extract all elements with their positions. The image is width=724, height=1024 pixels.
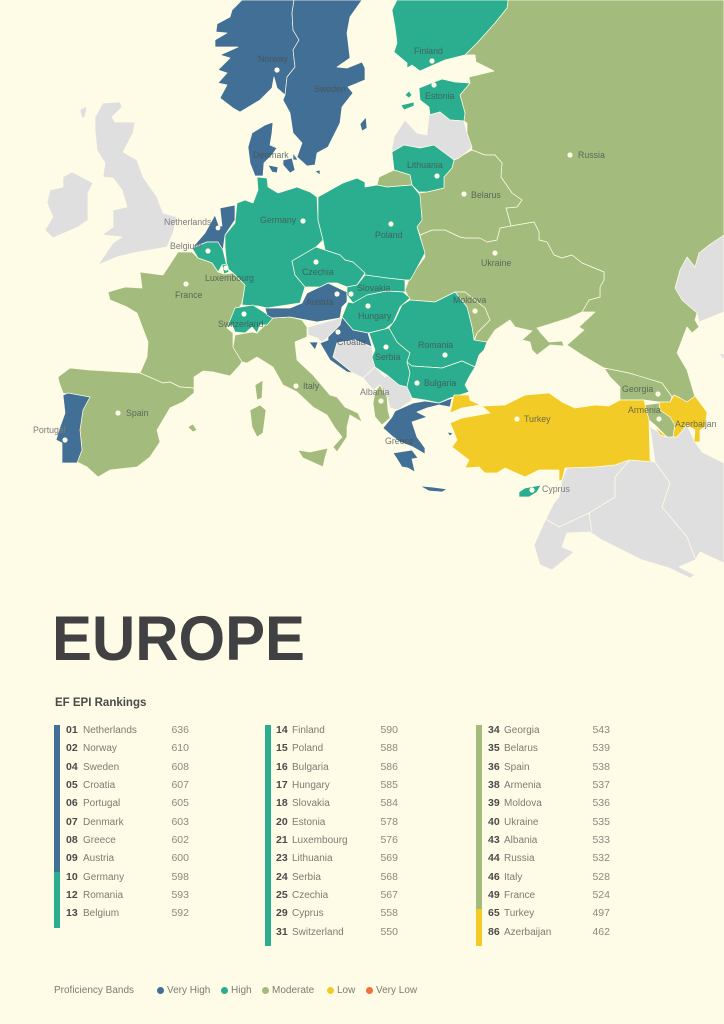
rankings column 1	[54, 724, 189, 928]
country labels: Belarus	[471, 190, 501, 200]
country labels: Switzerland	[218, 319, 264, 329]
country: Lithuania	[392, 145, 454, 192]
row: 01	[66, 724, 78, 736]
country labels: Norway	[258, 54, 288, 64]
row: 24	[276, 871, 288, 883]
row: 578	[380, 816, 398, 828]
row: 65	[488, 907, 500, 919]
country labels: Albania	[360, 387, 389, 397]
island: Corsica	[255, 380, 263, 400]
Middle East borders	[544, 461, 695, 558]
row: 29	[276, 907, 288, 919]
capital dots	[62, 58, 662, 493]
row: 07	[66, 816, 78, 828]
country: Moldova	[455, 292, 490, 340]
country: Croatia	[309, 317, 372, 373]
row: 39	[488, 797, 500, 809]
country: Bosnia	[333, 340, 375, 378]
row: 576	[380, 834, 398, 846]
row	[66, 889, 189, 901]
legend: proficiency bands: High	[231, 985, 252, 996]
country labels: Armenia	[628, 405, 661, 415]
row: 607	[171, 779, 189, 791]
row: Greece	[83, 835, 116, 846]
country: Spain	[58, 368, 194, 477]
legend: proficiency bands: Proficiency Bands	[54, 985, 134, 996]
row: 23	[276, 852, 288, 864]
country: Finland	[392, 0, 508, 71]
region: Kaliningrad	[377, 170, 412, 187]
row: 36	[488, 761, 500, 773]
band bar: high	[265, 725, 271, 946]
country: Cyprus	[519, 485, 541, 497]
country labels: Lithuania	[407, 160, 443, 170]
row: 585	[380, 779, 398, 791]
country labels: Azerbaijan	[675, 419, 717, 429]
legend: proficiency bands: Low	[337, 985, 355, 996]
country labels: France	[175, 290, 202, 300]
row: Turkey	[504, 908, 534, 919]
island: Sicily	[298, 448, 328, 467]
legend: proficiency bands: Very High	[167, 985, 210, 996]
row	[66, 834, 189, 846]
row	[488, 816, 610, 828]
country labels: Slovakia	[357, 283, 390, 293]
row: 497	[592, 907, 610, 919]
row: Sweden	[83, 762, 119, 773]
row: Georgia	[504, 725, 540, 736]
row: Moldova	[504, 798, 542, 809]
country labels: Georgia	[622, 384, 653, 394]
row: Switzerland	[292, 927, 344, 938]
row	[488, 742, 610, 754]
island: Sardinia	[250, 405, 266, 437]
country labels: Germany	[260, 215, 297, 225]
row: 569	[380, 852, 398, 864]
row: 12	[66, 889, 78, 901]
row: Spain	[504, 762, 530, 773]
country labels: Hungary	[358, 311, 392, 321]
country labels: Portugal	[33, 425, 66, 435]
row: 10	[66, 871, 78, 883]
row: 590	[380, 724, 398, 736]
row: Belgium	[83, 908, 119, 919]
legend: proficiency bands: Very Low	[376, 985, 417, 996]
row	[276, 779, 398, 791]
country: Belarus	[417, 150, 522, 242]
row	[276, 742, 398, 754]
row	[488, 724, 610, 736]
row	[66, 742, 189, 754]
row: 535	[592, 816, 610, 828]
row	[276, 907, 398, 919]
region: Kazakhstan	[675, 235, 724, 322]
country: Belgium	[192, 242, 227, 272]
row: 34	[488, 724, 500, 736]
row	[66, 852, 189, 864]
row: 539	[592, 742, 610, 754]
row: 25	[276, 889, 288, 901]
country labels: Belgium	[170, 241, 202, 251]
row	[488, 907, 610, 919]
row: Austria	[83, 853, 114, 864]
country: Serbia	[369, 328, 410, 387]
row: Finland	[292, 725, 325, 736]
country labels: Poland	[375, 230, 402, 240]
row	[66, 761, 189, 773]
row: 598	[171, 871, 189, 883]
row: 538	[592, 761, 610, 773]
row: 600	[171, 852, 189, 864]
row: 14	[276, 724, 288, 736]
title: EUROPE	[52, 604, 305, 674]
island: Gotland	[360, 117, 367, 131]
row: Ukraine	[504, 817, 538, 828]
row: 603	[171, 816, 189, 828]
band bar: moderate and low	[476, 725, 482, 946]
row: 38	[488, 779, 500, 791]
row: 35	[488, 742, 500, 754]
islands: Hebrides	[80, 106, 87, 118]
row: 586	[380, 761, 398, 773]
row	[488, 834, 610, 846]
country labels: Moldova	[453, 295, 486, 305]
row: Netherlands	[83, 725, 137, 736]
row	[276, 852, 398, 864]
country: Portugal	[56, 393, 90, 463]
row: 533	[592, 834, 610, 846]
country: Estonia	[419, 79, 470, 121]
country: United Kingdom	[95, 102, 177, 265]
country: Ukraine	[405, 222, 604, 355]
country labels: Cyprus	[542, 484, 570, 494]
country labels: Denmark	[253, 150, 289, 160]
country labels: Croatia	[337, 337, 365, 347]
row: 02	[66, 742, 78, 754]
country labels: Turkey	[524, 414, 551, 424]
row: 44	[488, 852, 500, 864]
row: Azerbaijan	[504, 927, 551, 938]
country labels	[33, 46, 717, 494]
row: Hungary	[292, 780, 330, 791]
country labels: Russia	[578, 150, 605, 160]
country: Armenia	[644, 403, 675, 437]
country labels: Romania	[418, 340, 453, 350]
row: Czechia	[292, 890, 328, 901]
row	[66, 724, 189, 736]
country labels: Italy	[303, 381, 320, 391]
row	[276, 871, 398, 883]
map of Europe	[33, 0, 724, 578]
country: Hungary	[342, 291, 410, 333]
row: 524	[592, 889, 610, 901]
row: Serbia	[292, 872, 321, 883]
country labels: Luxembourg	[205, 273, 254, 283]
row: Germany	[83, 872, 124, 883]
country: Austria	[265, 283, 347, 322]
row: 568	[380, 871, 398, 883]
row: Belarus	[504, 743, 538, 754]
row	[488, 926, 610, 938]
islands: Saaremaa	[401, 102, 414, 110]
row	[276, 834, 398, 846]
country: Italy	[233, 317, 362, 452]
rankings column 2	[265, 724, 398, 946]
country labels: Greece	[385, 436, 414, 446]
row: 08	[66, 834, 78, 846]
country labels: Sweden	[314, 84, 346, 94]
row	[276, 761, 398, 773]
country labels: Austria	[306, 297, 333, 307]
row	[66, 797, 189, 809]
country: Denmark	[248, 122, 320, 176]
country: Turkey	[450, 393, 655, 481]
row: 09	[66, 852, 78, 864]
row: Lithuania	[292, 853, 333, 864]
country labels: Bulgaria	[424, 378, 456, 388]
country labels: Czechia	[302, 267, 334, 277]
rankings column 3	[476, 724, 610, 946]
row	[66, 779, 189, 791]
country: Romania	[389, 292, 487, 368]
row	[488, 889, 610, 901]
region: Montenegro, Kosovo, Macedonia	[363, 367, 412, 410]
row: 610	[171, 742, 189, 754]
country labels: Spain	[126, 408, 149, 418]
country: Czechia	[292, 247, 365, 287]
country: Albania	[373, 385, 390, 425]
row: 16	[276, 761, 288, 773]
country: Russia	[460, 0, 724, 402]
row: 593	[171, 889, 189, 901]
row: Romania	[83, 890, 123, 901]
row: Bulgaria	[292, 762, 329, 773]
country: Sweden	[283, 0, 365, 166]
row: Slovakia	[292, 798, 330, 809]
row: France	[504, 890, 535, 901]
row: 605	[171, 797, 189, 809]
country: Poland	[318, 178, 425, 280]
row: 21	[276, 834, 288, 846]
band bar: very high and high	[54, 725, 60, 928]
row: 584	[380, 797, 398, 809]
country: Slovenia	[308, 317, 342, 342]
row: 608	[171, 761, 189, 773]
row: 43	[488, 834, 500, 846]
row	[66, 816, 189, 828]
rankings heading: EF EPI Rankings	[55, 697, 146, 709]
row: 40	[488, 816, 500, 828]
row	[276, 724, 398, 736]
row: 17	[276, 779, 288, 791]
country labels: Serbia	[375, 352, 401, 362]
row: 588	[380, 742, 398, 754]
legend: proficiency bands: Moderate	[272, 985, 314, 996]
row: 18	[276, 797, 288, 809]
row: 537	[592, 779, 610, 791]
row	[276, 797, 398, 809]
row: Croatia	[83, 780, 115, 791]
country: Latvia	[392, 112, 472, 160]
row: 86	[488, 926, 500, 938]
row: 536	[592, 797, 610, 809]
row: 550	[380, 926, 398, 938]
country: Azerbaijan	[655, 395, 707, 442]
row	[66, 907, 189, 919]
row: 13	[66, 907, 78, 919]
row: 31	[276, 926, 288, 938]
row	[488, 779, 610, 791]
country: Ireland	[45, 172, 93, 238]
row: 532	[592, 852, 610, 864]
row: 06	[66, 797, 78, 809]
row	[488, 761, 610, 773]
row: 592	[171, 907, 189, 919]
country: Norway	[215, 0, 299, 112]
row: 636	[171, 724, 189, 736]
row: 20	[276, 816, 288, 828]
row	[276, 816, 398, 828]
row: Italy	[504, 872, 522, 883]
row: Poland	[292, 743, 323, 754]
country labels: Ukraine	[481, 258, 511, 268]
row: Russia	[504, 853, 535, 864]
row: Cyprus	[292, 908, 324, 919]
country: Netherlands	[192, 205, 235, 250]
region: Caspian east shore	[719, 353, 724, 360]
country: Bulgaria	[407, 361, 475, 403]
country: Germany	[225, 177, 323, 308]
country labels: Estonia	[425, 91, 454, 101]
row: 528	[592, 871, 610, 883]
country: Greece	[383, 398, 453, 492]
row	[66, 871, 189, 883]
country: Georgia	[604, 368, 672, 402]
country: Switzerland	[227, 305, 273, 333]
row: Norway	[83, 743, 117, 754]
row: Armenia	[504, 780, 541, 791]
row: Luxembourg	[292, 835, 348, 846]
country: Slovakia	[347, 275, 405, 303]
legend: proficiency bands	[54, 982, 424, 998]
row: 49	[488, 889, 500, 901]
row: 05	[66, 779, 78, 791]
country labels: Netherlands	[164, 217, 212, 227]
row	[488, 852, 610, 864]
country: France	[108, 252, 245, 388]
row: 543	[592, 724, 610, 736]
country labels: Finland	[414, 46, 443, 56]
row	[276, 889, 398, 901]
islands: Estonia	[405, 91, 412, 98]
row: 567	[380, 889, 398, 901]
row	[488, 797, 610, 809]
row	[276, 926, 398, 938]
row: 46	[488, 871, 500, 883]
row: Portugal	[83, 798, 120, 809]
region: Middle East	[534, 425, 724, 578]
row: 558	[380, 907, 398, 919]
row: 04	[66, 761, 78, 773]
row: Albania	[504, 835, 537, 846]
row: Denmark	[83, 817, 124, 828]
row: 462	[592, 926, 610, 938]
country: Luxembourg	[222, 264, 229, 274]
row: 15	[276, 742, 288, 754]
island: Balearics	[188, 424, 197, 432]
row: Estonia	[292, 817, 325, 828]
row	[488, 871, 610, 883]
row: 602	[171, 834, 189, 846]
